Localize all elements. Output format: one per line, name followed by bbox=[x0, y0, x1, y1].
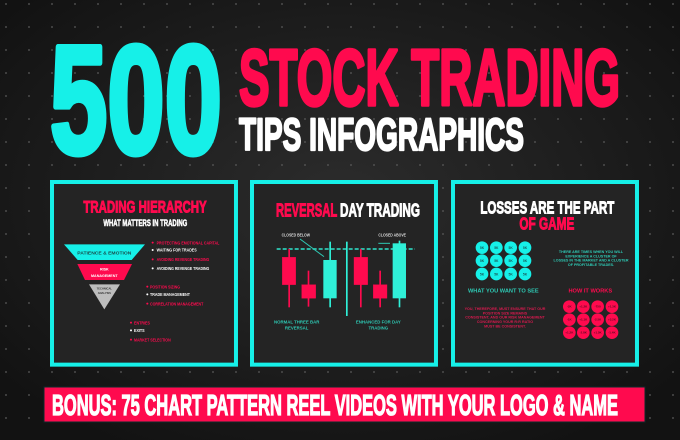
text: consistency: CONCERNING YOUR R:R RATIO bbox=[477, 320, 533, 324]
candlestick chart: ENHANCED FOR DAY bbox=[356, 319, 401, 324]
red circle grid: -1.4K bbox=[608, 331, 616, 335]
bullet list 1: AVOIDING REVENGE TRADING bbox=[157, 266, 210, 271]
bullet list 2: CORRELATION MANAGEMENT bbox=[150, 301, 203, 306]
red circle grid: -750 bbox=[595, 305, 601, 309]
text: clusters bbox=[554, 250, 629, 267]
red circle grid: +1.5K bbox=[594, 331, 603, 335]
cyan circle grid: 5K bbox=[509, 272, 513, 276]
pyramid chart: TECHNICAL bbox=[97, 287, 112, 291]
pyramid chart: MANAGEMENT bbox=[91, 274, 118, 278]
subheading: WHAT MATTERS IN TRADING bbox=[103, 218, 187, 228]
heading: losses bbox=[480, 197, 614, 233]
bullet list 1 bbox=[152, 240, 219, 271]
cyan circle grid: 5K bbox=[494, 246, 499, 250]
cyan circle grid: 5K bbox=[480, 272, 485, 276]
bullet list 1: PROTECTING EMOTIONAL CAPITAL bbox=[157, 240, 219, 245]
red circle grid: +1.3K bbox=[608, 305, 617, 309]
red circle grid bbox=[563, 300, 618, 339]
red circle grid: -2K bbox=[567, 305, 573, 309]
red circle grid: -2.8K bbox=[580, 331, 588, 335]
heading: reversal day trading: REVERSAL bbox=[276, 200, 337, 221]
candlestick chart: CLOSED BELOW bbox=[282, 233, 310, 238]
text: consistency: CONSISTENT, AND OUR RISK MANAGEMENT bbox=[465, 316, 546, 320]
text: consistency: YOU, THEREFORE, MUST ENSURE THAT OUR bbox=[465, 307, 546, 311]
heading: trading hierarchy: TRADING HIERARCHY bbox=[83, 197, 207, 216]
heading: losses: OF GAME bbox=[519, 213, 574, 233]
text: consistency: POSITION SIZE REMAINS bbox=[483, 311, 528, 315]
cyan circle grid: 5K bbox=[509, 246, 513, 250]
label: how it works: HOW IT WORKS bbox=[568, 288, 612, 294]
panel: reversal day trading bbox=[252, 182, 436, 365]
cyan circle grid: 5K bbox=[494, 259, 499, 263]
pyramid chart: ANALYSIS bbox=[98, 291, 111, 295]
text: consistency bbox=[465, 307, 546, 328]
cyan circle grid: 5K bbox=[509, 259, 513, 263]
candlestick chart: TRADING bbox=[368, 326, 389, 331]
cyan circle grid bbox=[476, 241, 531, 280]
bullet list 3: MARKET SELECTION bbox=[134, 337, 171, 342]
candlestick chart: REVERSAL bbox=[285, 326, 309, 331]
cyan circle grid: 5K bbox=[480, 259, 485, 263]
title: 500: 500 bbox=[50, 14, 222, 186]
candlestick chart bbox=[274, 233, 415, 331]
pyramid chart: PATIENCE & EMOTION bbox=[77, 251, 132, 257]
red circle grid: -2.5K bbox=[594, 318, 602, 322]
pyramid chart bbox=[64, 244, 145, 309]
bullet list 3 bbox=[130, 320, 171, 342]
bullet list 1: AVOIDING REVENGE TRADING bbox=[157, 257, 210, 262]
text: clusters: LOSSES IN THE MARKET AND A CLUSTER bbox=[554, 259, 629, 263]
bullet list 3: EXITS bbox=[134, 328, 145, 333]
cyan circle grid: 5K bbox=[523, 272, 528, 276]
cyan circle grid: 5K bbox=[480, 246, 485, 250]
bullet list 3: ENTRIES bbox=[134, 320, 150, 325]
panel: trading hierarchy bbox=[52, 182, 236, 365]
cyan circle grid: 5K bbox=[494, 272, 499, 276]
text: consistency: MUST BE CONSISTENT. bbox=[484, 324, 526, 328]
text: clusters: OF PROFITABLE TRADES. bbox=[568, 263, 614, 267]
bullet list 2: POSITION SIZING bbox=[150, 284, 180, 289]
candlestick chart: CLOSED ABOVE bbox=[378, 233, 406, 238]
red circle grid: +1.2K bbox=[579, 305, 588, 309]
pyramid chart: RISK bbox=[100, 267, 109, 271]
text: clusters: EXPERIENCE A CLUSTER OF bbox=[565, 254, 617, 258]
cyan circle grid: 5K bbox=[523, 246, 528, 250]
red circle grid: +3.2K bbox=[608, 318, 617, 322]
red circle grid: +1.1K bbox=[579, 318, 588, 322]
bullet list 2 bbox=[146, 284, 203, 306]
bullet list 2: TRADE MANAGEMENT bbox=[150, 292, 190, 297]
cyan circle grid: 5K bbox=[523, 259, 528, 263]
panel: losses are the part of game bbox=[453, 182, 637, 365]
label: what you want to see: WHAT YOU WANT TO SEE bbox=[468, 288, 539, 294]
text: clusters: THERE ARE TIMES WHEN YOU WILL bbox=[559, 250, 624, 254]
heading: reversal day trading: DAY TRADING bbox=[340, 200, 420, 221]
candlestick chart: NORMAL THREE BAR bbox=[274, 319, 320, 324]
bullet list 1: WAITING FOR TRADES bbox=[157, 248, 197, 253]
red circle grid: +1.2K bbox=[565, 331, 574, 335]
red circle grid: -1K bbox=[567, 318, 573, 322]
